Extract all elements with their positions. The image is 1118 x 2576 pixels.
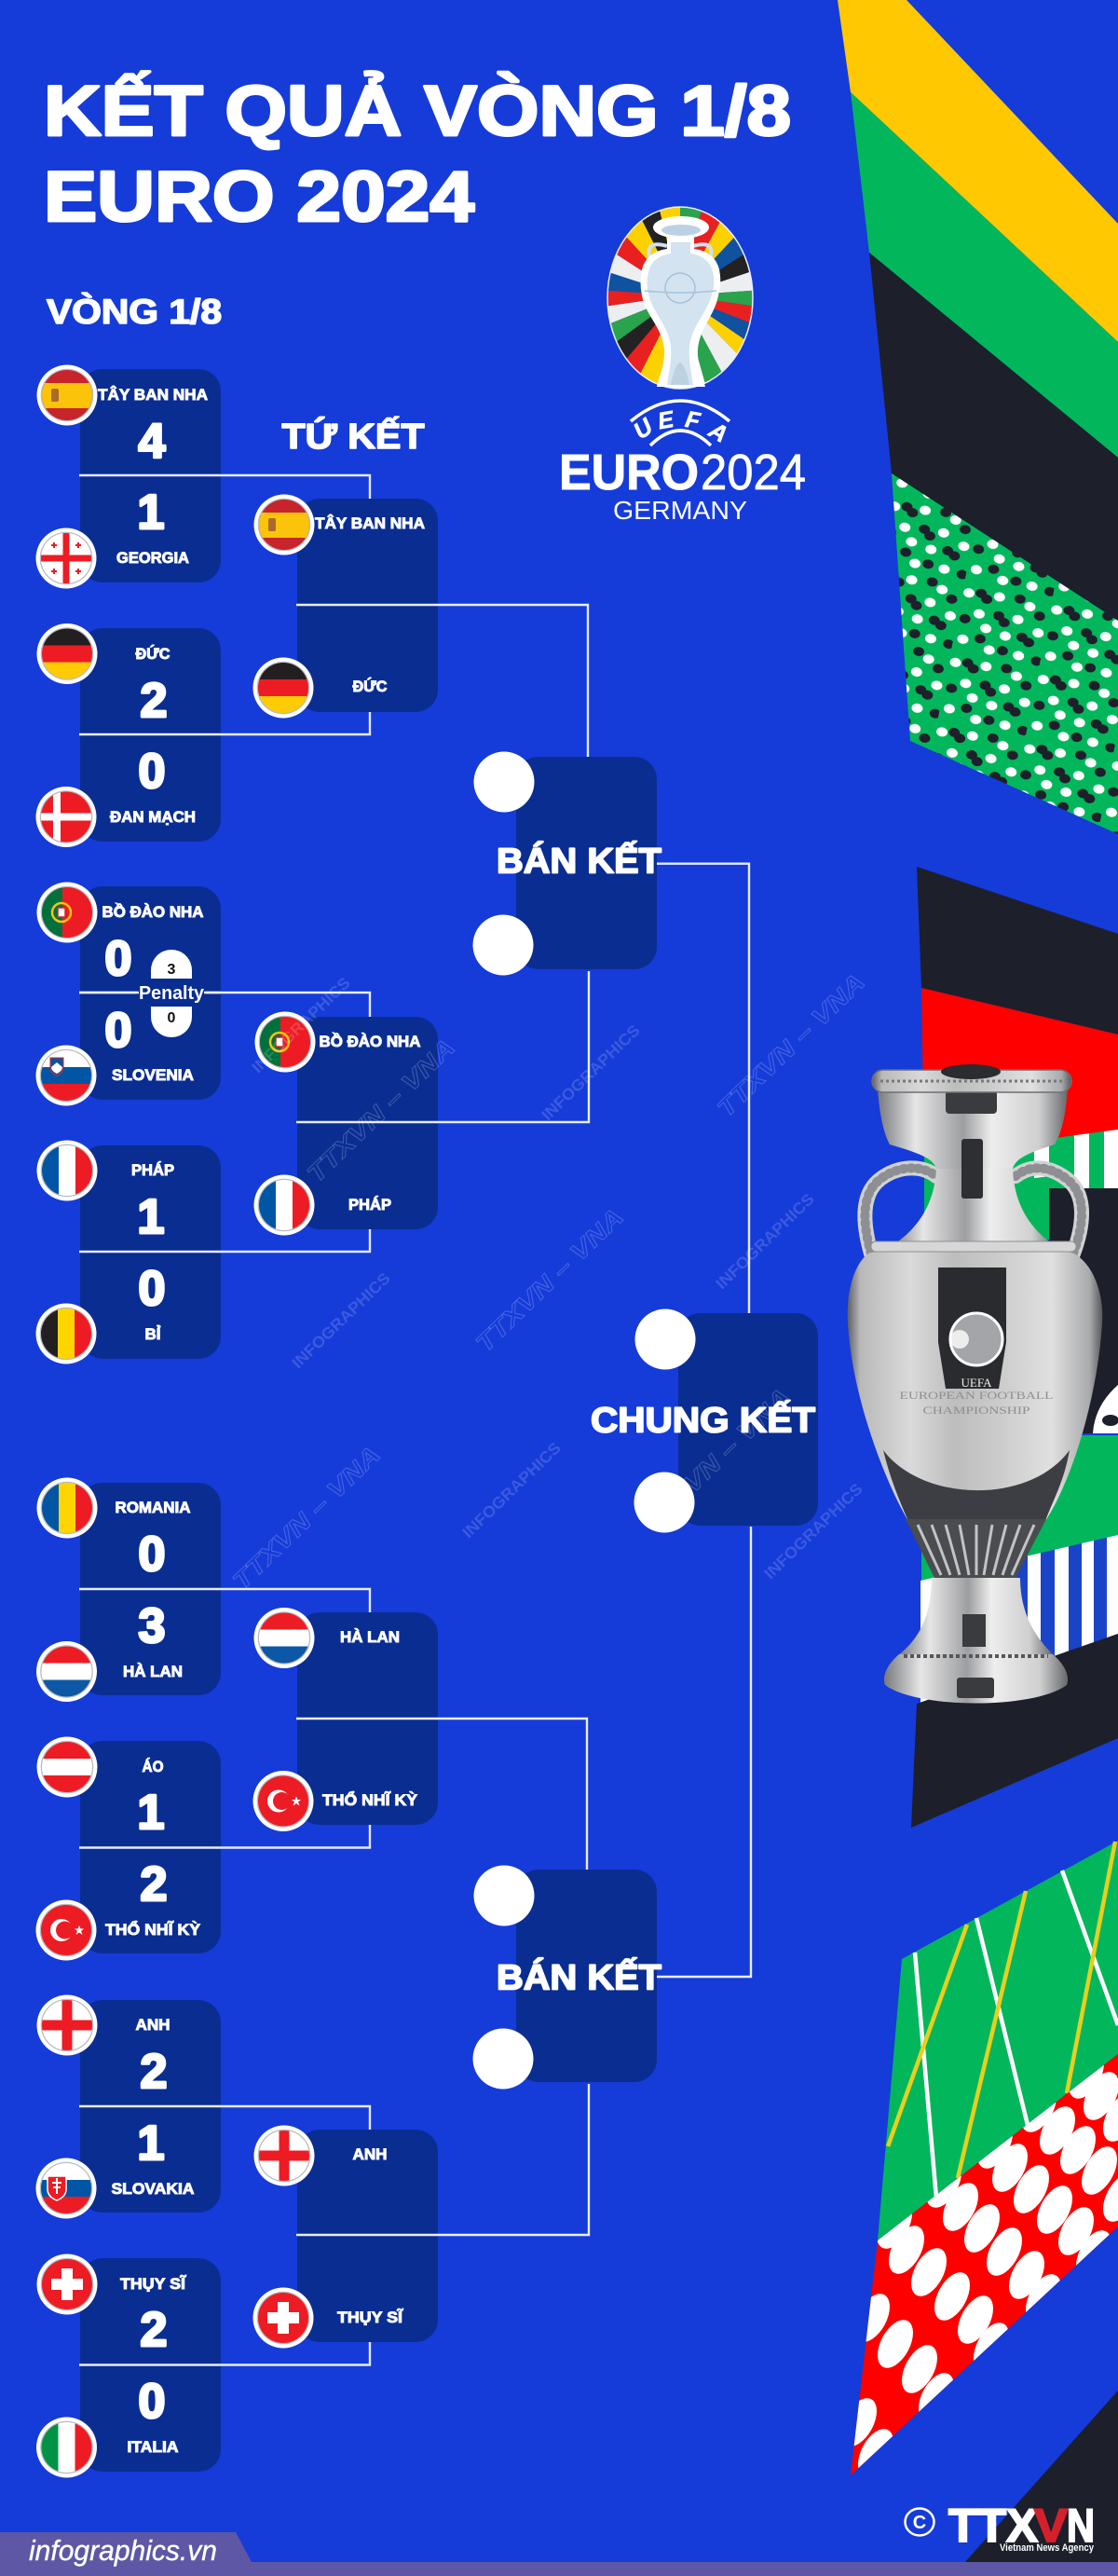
- panel: semi-final 2: [473, 1527, 751, 2090]
- footer bar: [0, 2532, 1118, 2576]
- watermarks: INFOGRAPHICS: [539, 1021, 644, 1124]
- penalty score: Penalty: [139, 983, 205, 1004]
- panel: England vs Slovakia: SLOVAKIA: [112, 2181, 195, 2198]
- panel: Spain vs Georgia: 1: [138, 486, 164, 540]
- panel: Switzerland vs Italy: THỤY SĨ: [120, 2274, 187, 2293]
- panel: England vs Slovakia: 1: [138, 2117, 164, 2171]
- panel: France vs Belgium: 0: [139, 1262, 165, 1316]
- watermarks: INFOGRAPHICS: [713, 1190, 818, 1293]
- heading: round of 16: VÒNG 1/8: [47, 292, 222, 331]
- watermarks: INFOGRAPHICS: [761, 1480, 866, 1583]
- decoration: top right stripes: [838, 0, 1118, 834]
- panel: quarter-final 3: [253, 1608, 587, 1870]
- panel: Romania vs Netherlands: [36, 1478, 370, 1702]
- UEFA wordmark: E: [656, 406, 677, 434]
- footer site name: infographics.vn: [29, 2534, 217, 2567]
- decoration: bottom right green and red panels: [834, 1841, 1118, 2563]
- trophy engraving: [900, 1376, 1053, 1417]
- EURO2024 wordmark: [559, 445, 806, 525]
- panel: Germany vs Denmark: 2: [141, 674, 167, 728]
- panel: Portugal vs Slovenia: 0: [105, 1004, 131, 1058]
- UEFA wordmark: U: [629, 413, 659, 445]
- watermarks: TTXVN – VNA: [302, 1033, 460, 1188]
- watermarks: TTXVN – VNA: [712, 967, 870, 1123]
- panel: quarter-final 2: PHÁP: [348, 1196, 391, 1213]
- fluted base: [906, 1519, 1046, 1578]
- trophy engraving: UEFA: [961, 1376, 992, 1390]
- panel: Romania vs Netherlands: 3: [139, 1599, 165, 1653]
- handles: [865, 1168, 1082, 1254]
- panel: Spain vs Georgia: 4: [139, 415, 166, 469]
- TTXVN copyright logo: Vietnam News Agency: [1000, 2542, 1095, 2554]
- panel: quarter-final 4: ANH: [352, 2146, 388, 2163]
- panel: France vs Belgium: BỈ: [145, 1325, 161, 1343]
- panel: Portugal vs Slovenia: SLOVENIA: [112, 1067, 194, 1084]
- UEFA wordmark: [629, 401, 732, 448]
- panel: Austria vs Turkey: THỔ NHĨ KỲ: [105, 1920, 200, 1939]
- logo: UEFA Euro 2024: [559, 196, 806, 525]
- panel: Switzerland vs Italy: 2: [141, 2303, 167, 2357]
- watermarks: TTXVN – VNA: [227, 1440, 386, 1596]
- panel: semi-final 1: [473, 751, 749, 1313]
- panel: Germany vs Denmark: ĐỨC: [136, 645, 170, 663]
- panel: Spain vs Georgia: GEORGIA: [116, 550, 189, 567]
- panel: France vs Belgium: PHÁP: [131, 1161, 174, 1179]
- panel: quarter-final 2: [253, 971, 589, 1236]
- logo trophy: [641, 216, 720, 387]
- title: [44, 72, 791, 237]
- EURO2024 wordmark: EURO: [559, 445, 699, 500]
- trophy engraving: CHAMPIONSHIP: [922, 1404, 1030, 1417]
- heading: quarter-finals: TỨ KẾT: [281, 416, 425, 457]
- penalty score: [79, 950, 221, 1037]
- collar: [871, 1241, 1076, 1252]
- panel: Portugal vs Slovenia: 0: [105, 932, 131, 986]
- panel: France vs Belgium: 1: [138, 1190, 164, 1244]
- EURO2024 wordmark: 2024: [701, 445, 806, 500]
- panel: Romania vs Netherlands: 0: [139, 1528, 165, 1582]
- watermarks: INFOGRAPHICS: [289, 1269, 394, 1372]
- neck: [890, 1165, 1057, 1247]
- panel: England vs Slovakia: ANH: [136, 2017, 170, 2034]
- panel: semi-final 1: BÁN KẾT: [497, 841, 661, 882]
- penalty score: 3: [168, 962, 176, 978]
- trophy: [848, 1064, 1102, 1704]
- panel: quarter-final 3: HÀ LAN: [340, 1628, 400, 1646]
- TTXVN copyright logo: C: [913, 2513, 926, 2533]
- panel: quarter-final 4: [253, 2084, 589, 2349]
- UEFA wordmark: A: [703, 417, 732, 448]
- panel: Germany vs Denmark: ĐAN MẠCH: [110, 809, 196, 826]
- title: EURO 2024: [44, 158, 474, 237]
- rim: [878, 1089, 1068, 1169]
- watermarks: INFOGRAPHICS: [459, 1439, 565, 1541]
- panel: Switzerland vs Italy: ITALIA: [127, 2439, 179, 2456]
- TTXVN copyright logo: N: [1067, 2500, 1095, 2552]
- UEFA wordmark: F: [683, 406, 702, 434]
- plaque: [938, 1267, 1006, 1389]
- panel: quarter-final 3: THỔ NHĨ KỲ: [322, 1790, 417, 1809]
- panel: Spain vs Georgia: [35, 365, 370, 589]
- bowl: [848, 1244, 1102, 1521]
- EURO2024 wordmark: GERMANY: [613, 496, 747, 525]
- panel: Portugal vs Slovenia: [35, 882, 370, 1105]
- panel: England vs Slovakia: [35, 1994, 370, 2218]
- watermarks: TTXVN – VNA: [637, 1382, 796, 1538]
- panel: Germany vs Denmark: 0: [139, 745, 165, 799]
- panel: France vs Belgium: [35, 1141, 370, 1364]
- panel: Romania vs Netherlands: HÀ LAN: [123, 1663, 183, 1680]
- panel: Switzerland vs Italy: [36, 2254, 370, 2477]
- watermarks: INFOGRAPHICS: [249, 974, 354, 1076]
- panel: quarter-final 4: THỤY SĨ: [337, 2308, 404, 2326]
- panel: Germany vs Denmark: [35, 623, 370, 847]
- trophy engraving: EUROPEAN FOOTBALL: [900, 1389, 1053, 1402]
- panel: quarter-final 1: TÂY BAN NHA: [315, 514, 425, 532]
- watermarks: [227, 967, 870, 1596]
- panel: Romania vs Netherlands: ROMANIA: [116, 1500, 191, 1516]
- decoration: middle stripes behind trophy: [911, 867, 1118, 1828]
- panel: Austria vs Turkey: 1: [138, 1786, 164, 1840]
- panel: final: [591, 1309, 818, 1532]
- TTXVN copyright logo: TTX: [948, 2500, 1038, 2552]
- panel: semi-final 2: BÁN KẾT: [497, 1957, 661, 1998]
- panel: Switzerland vs Italy: 0: [139, 2375, 165, 2429]
- panel: England vs Slovakia: 2: [141, 2045, 167, 2099]
- panel: Austria vs Turkey: [35, 1737, 370, 1961]
- panel: quarter-final 1: [253, 494, 588, 757]
- title: KẾT QUẢ VÒNG 1/8: [44, 72, 791, 151]
- watermarks: TTXVN – VNA: [470, 1202, 629, 1358]
- panel: quarter-final 1: ĐỨC: [352, 678, 388, 695]
- TTXVN copyright logo: V: [1034, 2500, 1069, 2552]
- panel: Portugal vs Slovenia: BỒ ĐÀO NHA: [102, 903, 204, 921]
- panel: Spain vs Georgia: TÂY BAN NHA: [98, 386, 208, 404]
- foot: [899, 1578, 1053, 1654]
- penalty score: 0: [168, 1010, 176, 1026]
- TTXVN copyright logo: [906, 2500, 1095, 2554]
- panel: final: CHUNG KẾT: [591, 1400, 815, 1441]
- logo colour rays: [607, 207, 753, 388]
- panel: quarter-final 2: BỒ ĐÀO NHA: [319, 1033, 421, 1050]
- panel: Austria vs Turkey: 2: [141, 1857, 167, 1911]
- panel: Austria vs Turkey: ÁO: [142, 1758, 164, 1775]
